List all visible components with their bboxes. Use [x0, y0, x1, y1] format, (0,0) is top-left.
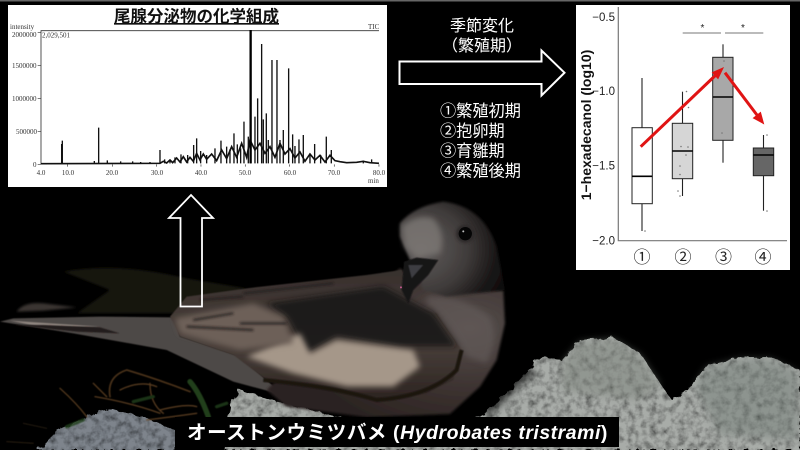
axes [618, 7, 787, 241]
y ticks: −1.5 [592, 160, 615, 172]
chromatogram axis labels: 500000 [16, 128, 38, 136]
x category labels: ② [674, 248, 692, 267]
photo: twigs and grass [7, 370, 227, 443]
chromatogram axis labels: 1500000 [12, 62, 37, 70]
chromatogram axis labels: 20.0 [106, 169, 119, 177]
y ticks: −1.0 [592, 86, 615, 98]
chromatogram title: 尾腺分泌物の化学組成 [114, 6, 279, 26]
tail and primaries [0, 317, 283, 395]
right arrow [400, 50, 564, 96]
wing coverts [175, 303, 293, 350]
significance stars [701, 23, 745, 34]
breeding stage list: ①繁殖初期 [440, 102, 521, 120]
chromatogram axis labels: 50.0 [239, 169, 252, 177]
photo: storm petrel bird [0, 202, 505, 417]
wing dark edge [263, 350, 462, 400]
eye [456, 224, 475, 243]
body [267, 268, 505, 417]
chromatogram axis labels: 60.0 [284, 169, 297, 177]
x category labels: ① [634, 248, 650, 267]
chromatogram axis labels: 2,029,501 [42, 32, 70, 40]
wing [170, 270, 462, 400]
y ticks: −2.0 [592, 236, 615, 248]
box 3 [713, 44, 733, 163]
breeding stage list: ③育雛期 [440, 142, 505, 160]
red trend arrows [641, 68, 764, 147]
chromatogram axis labels: 4.0 [37, 169, 46, 177]
box 2 [672, 92, 693, 196]
x category labels [634, 248, 772, 267]
photo: rocks [37, 337, 800, 450]
breeding stage list: ②抱卵期 [440, 122, 505, 140]
significance brackets [683, 32, 763, 34]
data points [644, 60, 768, 232]
chromatogram axis labels: 40.0 [195, 169, 208, 177]
chromatogram axis labels: TIC [368, 23, 380, 31]
breeding stage list [440, 102, 521, 180]
faint upper tail feathers [17, 268, 247, 313]
y axis label: 1−hexadecanol (log10) [578, 50, 594, 200]
box 4 [753, 135, 774, 211]
chromatogram axis labels: 1000000 [12, 95, 37, 103]
head [400, 202, 505, 297]
chromatogram axis labels: 2000000 [12, 31, 37, 39]
y ticks: −0.5 [592, 12, 615, 24]
x category labels: ④ [754, 248, 772, 267]
species caption: オーストンウミツバメ (Hydrobates tristrami) [187, 422, 608, 444]
chromatogram axis labels: 80.0 [373, 169, 386, 177]
wing pale feather patch [247, 333, 420, 387]
top edge strip [0, 0, 800, 2]
seasonal change heading: 季節変化 [450, 17, 514, 35]
chromatogram axis labels: 10.0 [62, 169, 75, 177]
box 1 [632, 78, 652, 231]
chromatogram axis labels [10, 23, 386, 185]
significance stars: * [701, 23, 705, 34]
x category labels: ③ [715, 248, 732, 267]
y ticks [592, 12, 615, 248]
species caption [175, 417, 619, 447]
chromatogram axis labels: min [368, 177, 379, 185]
significance stars: * [741, 23, 745, 34]
panel: chromatogram [8, 5, 387, 187]
panel: boxplot [576, 5, 790, 270]
chromatogram axis labels: 70.0 [328, 169, 341, 177]
chromatogram plot [38, 30, 379, 167]
up arrow [169, 195, 213, 306]
seasonal change heading [442, 17, 522, 55]
beak [402, 258, 438, 303]
wing upper dark zone [267, 287, 457, 353]
seasonal change heading: （繁殖期） [442, 37, 522, 55]
chromatogram axis labels: intensity [10, 23, 35, 31]
breeding stage list: ④繁殖後期 [440, 162, 521, 180]
chromatogram axis labels: 0 [33, 161, 37, 169]
chromatogram axis labels: 30.0 [151, 169, 164, 177]
